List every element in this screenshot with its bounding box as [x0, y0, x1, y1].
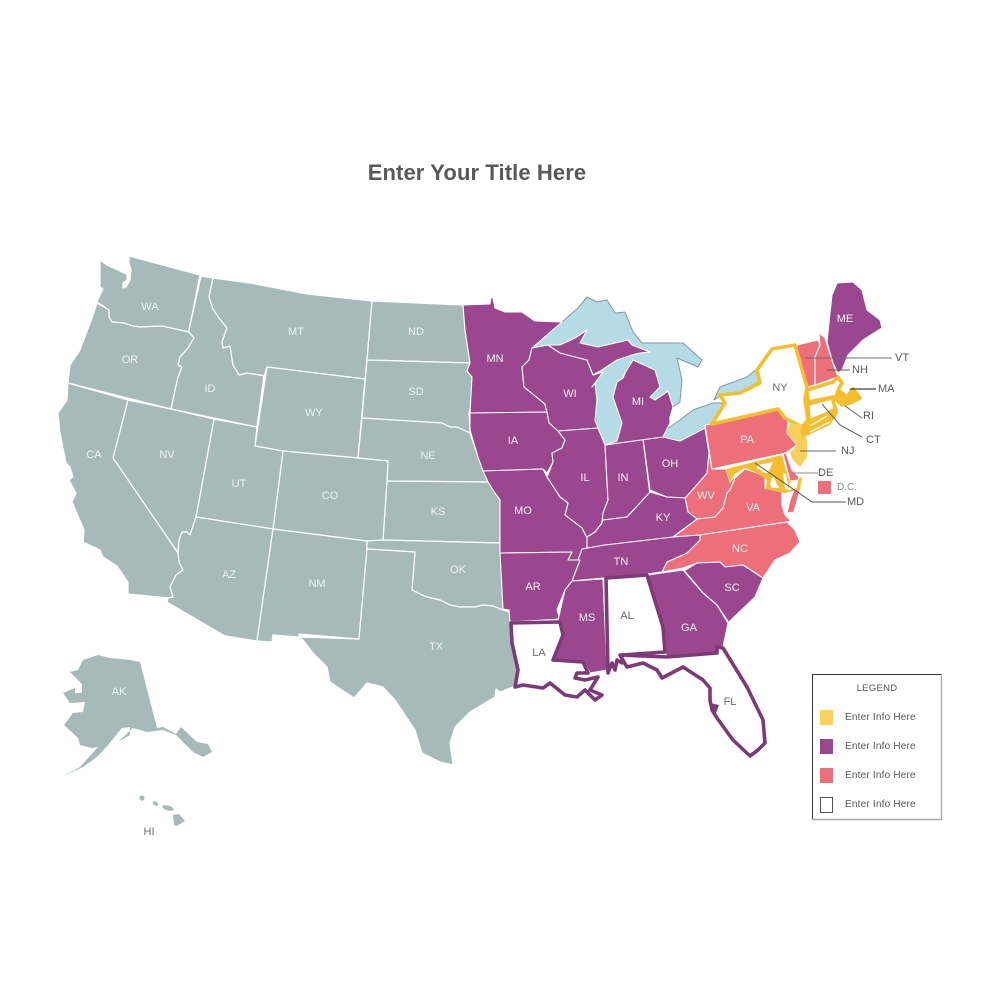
state labels on filled states: IL	[580, 472, 590, 484]
state labels on filled states: NV	[159, 449, 175, 461]
state labels on filled states: ID	[204, 383, 216, 395]
state labels on filled states: WY	[305, 407, 324, 419]
state labels on filled states: OR	[122, 354, 138, 366]
state labels on filled states: ME	[837, 313, 853, 325]
callout labels: RI	[863, 410, 874, 422]
D.C. marker	[818, 481, 857, 494]
title: Enter Your Title Here	[368, 160, 586, 185]
great lakes	[532, 297, 762, 445]
leader lines	[755, 358, 892, 502]
state labels on filled states: GA	[681, 622, 698, 634]
state labels on filled states	[86, 301, 853, 698]
callout labels: CT	[866, 434, 881, 446]
state labels on filled states: OH	[662, 458, 678, 470]
legend: LEGEND	[857, 683, 897, 694]
map: purple states	[463, 282, 882, 623]
map: dark purple outlined states	[511, 569, 765, 756]
callout labels: MA	[878, 383, 895, 395]
state labels on filled states: AZ	[222, 569, 236, 581]
callout labels: NJ	[841, 445, 854, 457]
state labels on white states: NY	[772, 382, 788, 394]
state labels on filled states: NC	[732, 543, 748, 555]
state labels on filled states: AR	[525, 581, 541, 593]
legend: Enter Info Here	[845, 799, 916, 810]
state labels on filled states: WV	[697, 490, 716, 502]
state labels on filled states: KS	[431, 506, 445, 518]
state labels on filled states: IN	[618, 472, 629, 484]
state labels on white states: LA	[532, 647, 546, 659]
state labels on filled states: ND	[408, 326, 424, 338]
state labels on filled states: MO	[514, 505, 532, 517]
map: western grey states	[58, 256, 517, 765]
state labels on filled states: TN	[614, 556, 628, 568]
state labels on filled states: MT	[288, 326, 304, 338]
state labels on filled states: VA	[746, 502, 761, 514]
state labels on filled states: MS	[579, 612, 595, 624]
state: MD	[726, 455, 802, 493]
state labels on filled states: MN	[486, 353, 504, 365]
state labels on filled states: CA	[86, 449, 102, 461]
state labels on filled states: KY	[656, 512, 671, 524]
state labels on filled states: SD	[408, 386, 424, 398]
callout labels: NH	[852, 364, 868, 376]
state labels on white states: FL	[724, 696, 736, 708]
legend: Enter Info Here	[845, 770, 916, 781]
state labels on filled states: TX	[429, 641, 444, 653]
callout labels: VT	[895, 352, 909, 364]
map: yellow outlined states	[712, 345, 860, 493]
legend	[812, 674, 942, 820]
state: DE	[783, 453, 799, 481]
state labels on filled states: WA	[141, 301, 159, 313]
D.C. marker: D.C.	[837, 482, 857, 493]
state labels on filled states: NM	[308, 578, 326, 590]
state labels on white states: HI	[144, 826, 154, 838]
state labels on filled states: MI	[632, 396, 644, 408]
legend: Enter Info Here	[845, 741, 916, 752]
state: NJ	[787, 423, 807, 467]
legend: Enter Info Here	[845, 712, 916, 723]
state labels on filled states: CO	[322, 490, 339, 502]
state labels on filled states: IA	[508, 435, 519, 447]
callout labels: MD	[847, 496, 864, 508]
state labels on filled states: AK	[112, 686, 127, 698]
map: pink states	[662, 333, 838, 578]
icon: Alaska	[63, 655, 212, 776]
state labels on filled states: NE	[420, 450, 436, 462]
state labels on filled states: OK	[450, 564, 467, 576]
state labels on white states: AL	[620, 610, 634, 622]
state labels on filled states: UT	[232, 478, 247, 490]
state: RI and Long Island	[800, 407, 838, 438]
callout labels	[818, 352, 909, 508]
state labels on filled states: WI	[563, 388, 577, 400]
state labels on filled states: SC	[724, 582, 740, 594]
state labels on white states	[144, 382, 788, 838]
state labels on filled states: PA	[740, 434, 755, 446]
callout labels: DE	[818, 467, 833, 479]
icon: Hawaii	[139, 795, 185, 826]
